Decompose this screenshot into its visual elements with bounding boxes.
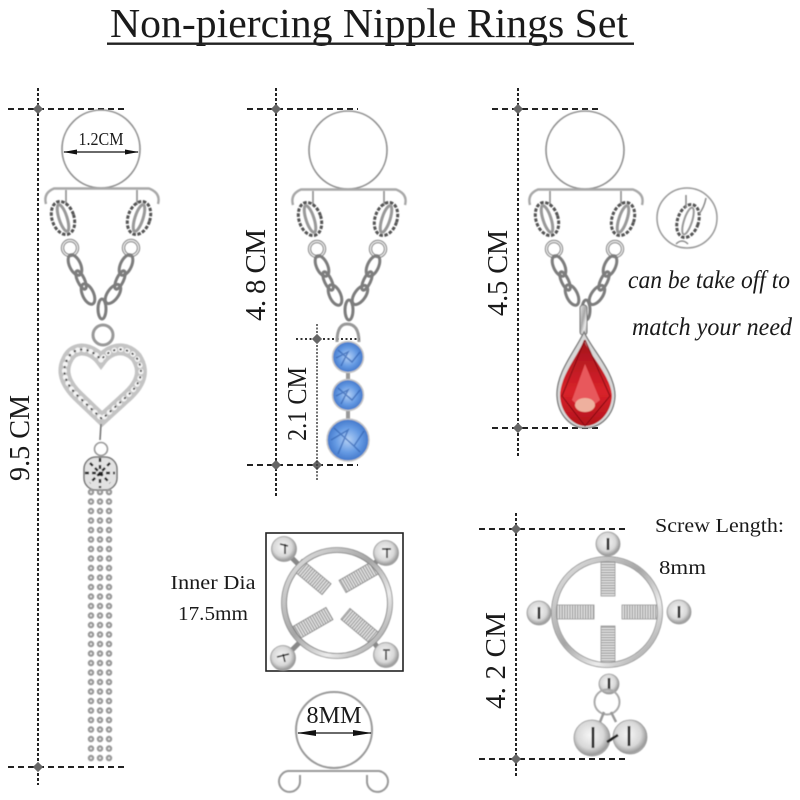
blue gem pendant (292, 111, 406, 461)
inset: detachable link detail (657, 188, 717, 248)
rhinestone heart (64, 349, 141, 419)
balls (270, 536, 398, 670)
title: Non-piercing Nipple Rings Set (110, 0, 629, 46)
dimension lines: bell piece, 4.2 CM (479, 513, 626, 776)
label: inner diameter (170, 572, 256, 625)
label: inner diameter: 17.5mm (178, 603, 248, 625)
label: 4.8 CM: 4. 8 CM (240, 229, 272, 321)
note: can be take off (628, 267, 792, 341)
bail (580, 305, 587, 335)
screws (293, 559, 379, 644)
gems (327, 342, 369, 461)
bail (337, 324, 359, 342)
ring (284, 550, 390, 656)
hanger with chain (45, 110, 159, 319)
stems (290, 556, 378, 650)
dimension lines: heart piece, 9.5 CM (8, 88, 124, 785)
label: 4.5 CM: 4.5 CM (482, 230, 514, 316)
tassel strands (91, 492, 109, 766)
drop setting and stone (557, 332, 615, 428)
hanger with chain (529, 111, 643, 320)
8MM ring with bar (279, 692, 388, 792)
dimension lines: 2.1 CM (296, 324, 360, 480)
label: screw length: 8mm (659, 558, 706, 579)
balls (527, 532, 691, 694)
label: 8MM: 8MM (306, 703, 362, 729)
stone facets (572, 364, 600, 412)
heart and tassel pendant (45, 110, 159, 766)
boxed four-screw ring (266, 533, 403, 671)
label: 4.2 CM: 4. 2 CM (480, 612, 512, 709)
label: screw length: Screw Length: (655, 516, 784, 537)
box (266, 533, 403, 671)
gem links (346, 370, 350, 380)
label: 9.5 CM: 9.5 CM (4, 395, 36, 481)
1.2 CM ring measurement (63, 129, 139, 154)
hanger with chain (292, 111, 406, 320)
dimension lines: blue gem piece, 4.8 CM (247, 88, 358, 497)
1.2 CM ring measurement: 1.2CM (78, 129, 124, 149)
arrow (298, 732, 371, 734)
screws (556, 558, 660, 666)
ring (554, 559, 660, 665)
bells (574, 720, 647, 756)
jump ring (594, 690, 620, 714)
label: screw length (655, 516, 784, 579)
note: can be take off: match your need (632, 314, 792, 341)
label: inner diameter: Inner Dia (170, 572, 256, 594)
gem facets (331, 350, 364, 454)
link (673, 202, 703, 240)
bell pendant screw ring (527, 532, 691, 756)
dimension lines: red gem piece, 4.5 CM (492, 88, 602, 458)
label: 2.1 CM: 2.1 CM (282, 367, 312, 441)
red drop pendant (529, 111, 643, 428)
pendant ring (93, 325, 113, 345)
note: can be take off: can be take off to (628, 267, 790, 294)
clear gem and link (84, 424, 117, 490)
